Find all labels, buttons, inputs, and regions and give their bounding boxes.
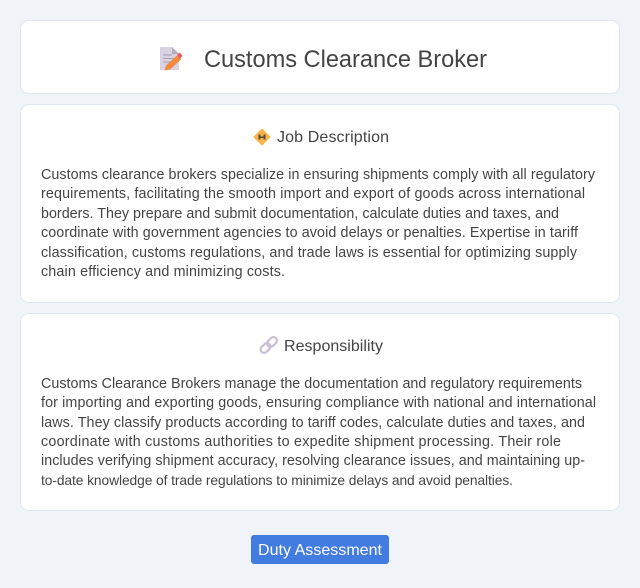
text block: responsibility: coordinate with customs authorities to expedite shipment processing. Their role xyxy=(41,434,561,450)
panel: job description xyxy=(20,104,620,302)
heading: job description: Job Description xyxy=(277,129,389,146)
text block: responsibility: includes verifying shipment accuracy, resolving clearance issues, and maintaining up- xyxy=(41,453,585,469)
text block: responsibility: Customs Clearance Brokers manage the documentation and regulatory requirements xyxy=(41,376,582,392)
heading: responsibility: Responsibility xyxy=(284,338,383,355)
text block: job description: Customs clearance brokers specialize in ensuring shipments comply with all regulatory xyxy=(41,167,596,183)
text block: responsibility: laws. They classify products according to tariff codes, calculate duties and taxes, and xyxy=(41,415,585,431)
icon: document with pencil xyxy=(160,47,182,70)
text block: job description: classification, customs regulations, and trade laws is essential for optimizing supply xyxy=(41,245,578,261)
icon: diamond road sign xyxy=(254,129,270,145)
text block: responsibility xyxy=(41,376,596,488)
text block: responsibility: to-date knowledge of trade regulations to minimize delays and avoid penalties. xyxy=(41,473,513,488)
text block: job description: coordinate with government agencies to avoid delays or penalties. Expertise in tariff xyxy=(41,225,578,241)
icon: chain link xyxy=(259,336,278,354)
text block: job description: borders. They prepare and submit documentation, calculate duties and taxes, and xyxy=(41,206,559,222)
button: duty assessment: Duty Assessment xyxy=(258,542,383,559)
text block: responsibility: for importing and exporting goods, ensuring compliance with national and international xyxy=(41,395,596,411)
text block: job description: chain efficiency and minimizing costs. xyxy=(41,264,285,280)
text block: job description xyxy=(41,167,596,280)
panel: title xyxy=(20,20,620,94)
title text: Customs Clearance Broker xyxy=(204,47,487,73)
text block: job description: requirements, facilitating the smooth import and export of goods across international xyxy=(41,186,585,202)
button: duty assessment xyxy=(251,535,389,564)
panel: responsibility xyxy=(20,314,620,510)
